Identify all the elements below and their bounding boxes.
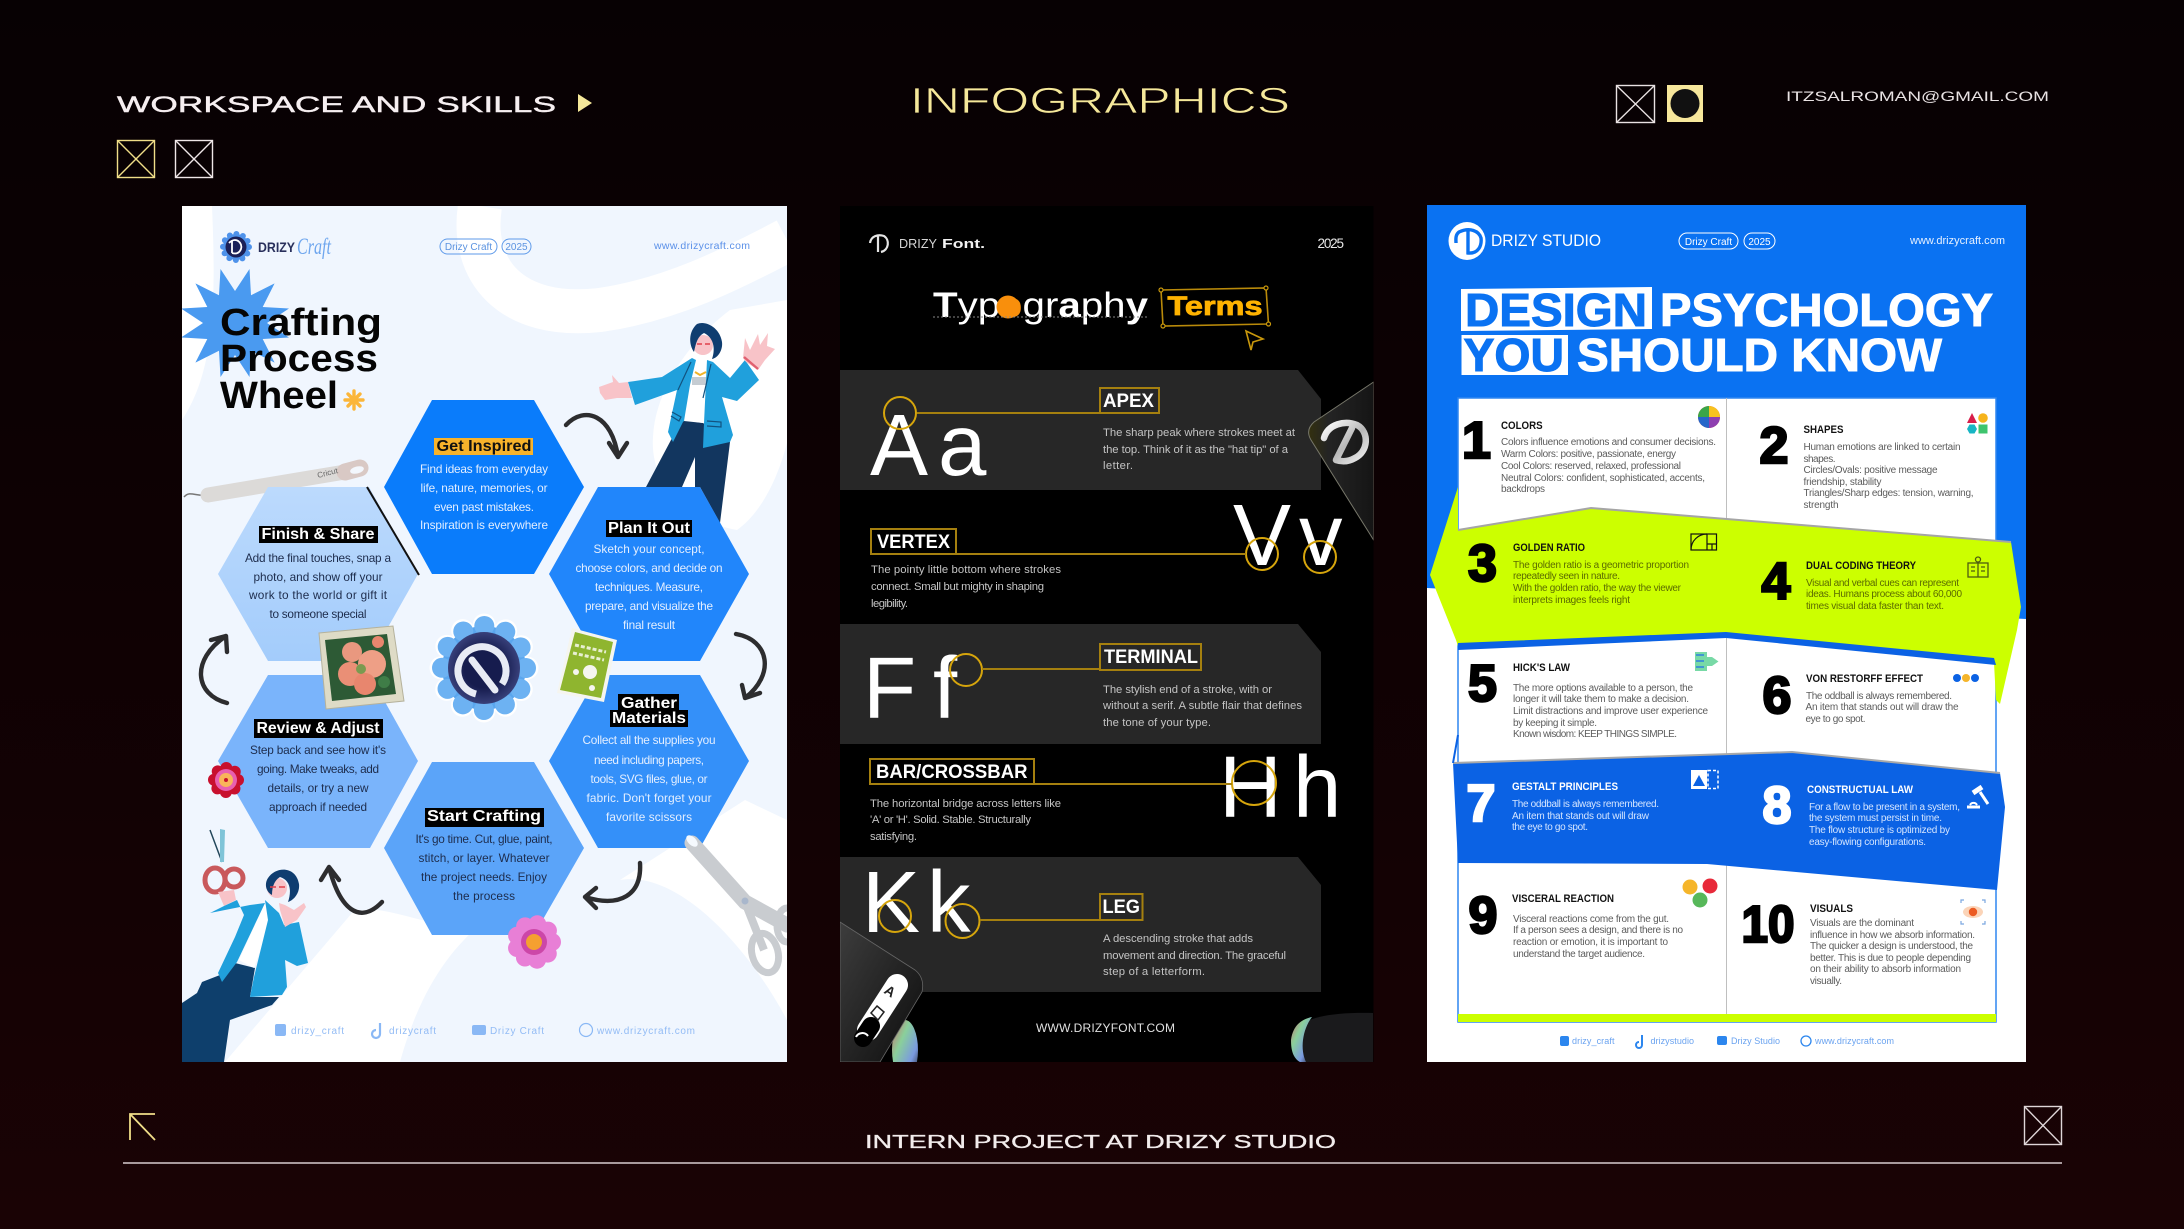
- hexagon: gather materials: Collect all the supplies you: [582, 733, 716, 747]
- icon: color wheel: [1698, 406, 1720, 428]
- term band: apex: The sharp peak where strokes meet at: [1103, 427, 1296, 439]
- term: bar crossbar: [869, 754, 1336, 842]
- illustration: scissors: [684, 833, 797, 976]
- heading: design psychology you should know: PSYCHOLOGY: [1660, 284, 1993, 336]
- item 9: visceral reaction: If a person sees a design, and there is no: [1513, 925, 1683, 936]
- hexagon: plan it out: techniques. Measure,: [595, 580, 703, 594]
- item 4: dual coding theory: Visual and verbal cues can represent: [1806, 578, 1959, 589]
- item 5: hick's law: Known wisdom: KEEP THINGS SIMPLE.: [1513, 729, 1677, 740]
- term: vertex: [870, 505, 1342, 610]
- term: bar crossbar: 'A' or 'H'. Solid. Stable. Structurally: [870, 814, 1031, 826]
- heading: crafting process wheel: Crafting: [220, 302, 382, 344]
- item 7: gestalt principles: the eye to go spot.: [1512, 822, 1588, 833]
- footer text: intern project: INTERN PROJECT AT DRIZY STUDIO: [865, 1132, 1336, 1152]
- term band: terminal: Ff: [863, 640, 958, 737]
- decorative glass tab with tool pill: [840, 922, 923, 1062]
- item 3: golden ratio: repeatedly seen in nature.: [1513, 571, 1620, 582]
- item 2: shapes: strength: [1804, 500, 1838, 511]
- hexagon: finish and share: work to the world or gift it: [248, 588, 388, 602]
- hexagon: get inspired: Get Inspired: [436, 438, 532, 455]
- panel: design psychology: [1427, 205, 2026, 1062]
- icon: blue star burst: [181, 269, 289, 377]
- item 5: hick's law: HICK'S LAW: [1513, 662, 1570, 674]
- term band: terminal: The stylish end of a stroke, with or: [1103, 684, 1272, 696]
- term band: leg: LEG: [1102, 897, 1140, 918]
- term: vertex: connect. Small but mighty in shaping: [871, 581, 1044, 593]
- item 5: hick's law: Limit distractions and improve user experience: [1513, 706, 1708, 717]
- item 2: shapes: [1760, 413, 1988, 511]
- logo: drizy font: [870, 235, 985, 252]
- social links row: drizystudio: [1650, 1036, 1694, 1046]
- logo: drizy craft: DRIZY: [258, 239, 296, 255]
- green band: [1430, 487, 2021, 704]
- item 10: visuals: The quicker a design is understood, the: [1810, 941, 1973, 952]
- item 9: visceral reaction: Visceral reactions come from the gut.: [1513, 914, 1669, 925]
- item 3: golden ratio: GOLDEN RATIO: [1513, 542, 1585, 554]
- item 1: colors: [1462, 406, 1720, 495]
- hexagon: gather materials: [549, 675, 749, 848]
- item 9: visceral reaction: VISCERAL REACTION: [1512, 893, 1614, 905]
- illustration: weeding tool: Cricut: [316, 466, 340, 480]
- icon: crossed box and filled circle box: [1616, 85, 1703, 122]
- hexagon: start crafting: stitch, or layer. Whatever: [418, 851, 550, 865]
- item 8: constructual law: For a flow to be present in a system,: [1809, 802, 1960, 813]
- hexagon: plan it out: choose colors, and decide on: [576, 561, 722, 575]
- header: workspace and skills: [117, 92, 592, 117]
- term: vertex: Vv: [1233, 487, 1343, 584]
- term band: leg: step of a letterform.: [1103, 966, 1205, 978]
- hexagon: plan it out: Sketch your concept,: [594, 542, 704, 556]
- item 10: visuals: 10: [1742, 896, 1794, 954]
- icon: three dots: [1953, 674, 1979, 682]
- item 6: von restorff effect: [1763, 667, 1979, 725]
- icon: gavel: [1967, 787, 1988, 807]
- hexagon: review and adjust: Step back and see how it's: [250, 743, 386, 757]
- hexagon: gather materials: need including papers,: [594, 753, 704, 767]
- website: www.drizycraft.com: [653, 240, 750, 252]
- heading: design psychology you should know: YOU: [1464, 329, 1564, 381]
- social links row: [275, 1023, 695, 1038]
- website footer: WWW.DRIZYFONT.COM: [1036, 1021, 1175, 1035]
- social links row: www.drizycraft.com: [1814, 1036, 1894, 1046]
- item 2: shapes: shapes.: [1804, 454, 1836, 465]
- logo: drizy studio: DRIZY STUDIO: [1491, 231, 1601, 250]
- logo: drizy font: DRIZY: [899, 236, 937, 251]
- item 3: golden ratio: With the golden ratio, the way the viewer: [1513, 583, 1682, 594]
- item 3: golden ratio: 3: [1468, 535, 1497, 593]
- term: bar crossbar: The horizontal bridge across letters like: [870, 798, 1061, 810]
- background swooshes: [182, 206, 787, 1062]
- term band: leg: [840, 854, 1321, 992]
- heading: design psychology you should know: SHOULD KNOW: [1577, 329, 1943, 381]
- year: 2025: [1318, 236, 1344, 251]
- item 10: visuals: on their ability to absorb information: [1810, 964, 1961, 975]
- pills: brand and year: [1679, 233, 1775, 249]
- social links row: drizy_craft: [1572, 1036, 1615, 1046]
- icon: crossed boxes left: [118, 140, 212, 178]
- pills: brand and year: Drizy Craft: [445, 242, 492, 253]
- hexagon: finish and share: to someone special: [270, 607, 366, 621]
- hexagon: review and adjust: [218, 675, 418, 848]
- term band: apex: letter.: [1103, 460, 1133, 472]
- item 5: hick's law: longer it will take them to make a decision.: [1513, 694, 1689, 705]
- hexagon: review and adjust: going. Make tweaks, add: [257, 762, 379, 776]
- icon: eye focus: [1961, 900, 1985, 924]
- hexagon: plan it out: Plan It Out: [608, 520, 691, 537]
- pills: brand and year: 2025: [1748, 237, 1771, 248]
- item 9: visceral reaction: reaction or emotion, it is important to: [1513, 937, 1668, 948]
- item 7: gestalt principles: An item that stands out will draw: [1512, 811, 1650, 822]
- term band: leg: A descending stroke that adds: [1103, 933, 1253, 945]
- term band: apex: the top. Think of it as the "hat tip" of a: [1103, 444, 1289, 456]
- hexagon: gather materials: Gather: [621, 695, 677, 712]
- hexagon: plan it out: final result: [623, 618, 676, 632]
- hexagon: start crafting: [384, 762, 584, 935]
- item 10: visuals: [1742, 896, 1985, 987]
- pills: brand and year: Drizy Craft: [1685, 237, 1732, 248]
- icon: emotion faces: [1682, 878, 1718, 908]
- title: infographics: INFOGRAPHICS: [910, 80, 1290, 121]
- item 2: shapes: friendship, stability: [1804, 477, 1882, 488]
- heading: design psychology you should know: DESIGN: [1465, 284, 1647, 336]
- social links row: www.drizycraft.com: [596, 1026, 695, 1037]
- item 8: constructual law: CONSTRUCTUAL LAW: [1807, 784, 1913, 796]
- term: bar crossbar: Hh: [1219, 739, 1341, 836]
- decorative iridescent shapes: [892, 1013, 1373, 1062]
- pills: brand and year: 2025: [505, 242, 528, 253]
- item 4: dual coding theory: ideas. Humans process about 60,000: [1806, 589, 1962, 600]
- hexagon: start crafting: Start Crafting: [427, 808, 541, 825]
- term: bar crossbar: satisfying.: [870, 831, 917, 843]
- icon: golden ratio: [1691, 534, 1716, 550]
- item 7: gestalt principles: [1467, 770, 1718, 833]
- item 6: von restorff effect: eye to go spot.: [1806, 714, 1866, 725]
- logo: drizy font: Font.: [942, 236, 985, 251]
- item 8: constructual law: [1763, 777, 1988, 848]
- decorative glass tab with D logo: [1309, 382, 1374, 540]
- heading: typography terms: Typography: [933, 286, 1149, 325]
- hexagon: start crafting: the process: [453, 889, 515, 903]
- logo: drizy craft: Craft: [297, 234, 331, 259]
- term band: apex: APEX: [1103, 391, 1154, 412]
- icon: corner arrow: [130, 1114, 155, 1140]
- item 4: dual coding theory: times visual data faster than text.: [1806, 601, 1944, 612]
- term band: terminal: TERMINAL: [1104, 647, 1198, 668]
- item 2: shapes: Human emotions are linked to certain: [1804, 442, 1960, 453]
- item 6: von restorff effect: An item that stands out will draw the: [1806, 702, 1959, 713]
- item 1: colors: Warm Colors: positive, passionate, energy: [1501, 449, 1676, 460]
- hexagon: review and adjust: Review & Adjust: [256, 720, 380, 737]
- item 3: golden ratio: [1468, 534, 1716, 606]
- icon: arrows converging: [1695, 652, 1718, 671]
- hexagon: finish and share: Add the final touches, snap a: [245, 551, 391, 565]
- illustration: weeding tool: [184, 465, 365, 497]
- heading: design psychology you should know: [1461, 284, 1993, 381]
- pills: brand and year: [440, 239, 531, 254]
- hexagon: gather materials: favorite scissors: [606, 810, 692, 824]
- item 2: shapes: 2: [1760, 417, 1788, 475]
- hexagon: get inspired: [384, 400, 584, 574]
- social links row: [1560, 1035, 1894, 1048]
- hexagon: plan it out: prepare, and visualize the: [585, 599, 713, 613]
- logo: drizy studio: [1448, 222, 1601, 260]
- item 5: hick's law: [1468, 652, 1718, 740]
- item 5: hick's law: 5: [1468, 655, 1497, 713]
- item 9: visceral reaction: [1469, 878, 1718, 960]
- hexagon: start crafting: the project needs. Enjoy: [421, 870, 547, 884]
- term: vertex: VERTEX: [877, 532, 950, 553]
- term band: terminal: [840, 624, 1321, 744]
- item 8: constructual law: the system must persist in time.: [1809, 813, 1942, 824]
- heading: crafting process wheel: Process: [220, 338, 378, 380]
- item 4: dual coding theory: 4: [1762, 553, 1791, 611]
- item 1: colors: Cool Colors: reserved, relaxed, professional: [1501, 461, 1681, 472]
- item 8: constructual law: easy-flowing configurations.: [1809, 837, 1926, 848]
- item 6: von restorff effect: 6: [1763, 667, 1791, 725]
- image: green paper card: [557, 628, 617, 702]
- social links row: Drizy Studio: [1731, 1036, 1780, 1046]
- hexagon: review and adjust: approach if needed: [269, 800, 367, 814]
- email: ITZSALROMAN@GMAIL.COM: [1786, 89, 2049, 104]
- item 3: golden ratio: interprets images feels right: [1513, 595, 1630, 606]
- item 1: colors: Neutral Colors: confident, sophisticated, accents,: [1501, 473, 1705, 484]
- white card grid: [1458, 398, 1996, 1022]
- term: vertex: legibility.: [871, 598, 908, 610]
- hexagon: start crafting: It's go time. Cut, glue, paint,: [416, 832, 552, 846]
- item 6: von restorff effect: VON RESTORFF EFFECT: [1806, 673, 1923, 685]
- heading: crafting process wheel: [220, 308, 380, 408]
- hexagon: get inspired: even past mistakes.: [434, 500, 534, 514]
- item 2: shapes: Triangles/Sharp edges: tension, warning,: [1804, 488, 1974, 499]
- decorative glass tab with tool pill: A: [881, 982, 899, 1001]
- item 7: gestalt principles: GESTALT PRINCIPLES: [1512, 781, 1618, 793]
- term band: terminal: the tone of your type.: [1103, 717, 1211, 729]
- header: workspace and skills: WORKSPACE AND SKILLS: [117, 92, 556, 117]
- logo: center badge: [441, 625, 527, 711]
- social links row: drizy_craft: [291, 1026, 344, 1037]
- blue band: [1453, 735, 2005, 890]
- item 1: colors: 1: [1462, 412, 1491, 470]
- item 7: gestalt principles: 7: [1467, 775, 1495, 833]
- item 10: visuals: Visuals are the dominant: [1810, 918, 1914, 929]
- illustration: woman in blue jacket: [599, 323, 775, 523]
- hexagon: finish and share: Finish & Share: [262, 526, 375, 543]
- hexagon: finish and share: [218, 487, 419, 661]
- icon: open book: [1968, 557, 1988, 577]
- item 9: visceral reaction: understand the target audience.: [1513, 949, 1645, 960]
- item 2: shapes: SHAPES: [1804, 424, 1844, 436]
- item 8: constructual law: 8: [1763, 777, 1791, 835]
- hexagon: gather materials: fabric. Don't forget your: [586, 791, 712, 805]
- image: framed flower artwork: [319, 626, 404, 709]
- item 9: visceral reaction: 9: [1469, 887, 1497, 945]
- icon: red flower: [214, 768, 238, 792]
- item 2: shapes: Circles/Ovals: positive message: [1804, 465, 1938, 476]
- term band: terminal: without a serif. A subtle flair that defines: [1102, 700, 1302, 712]
- term band: leg: movement and direction. The graceful: [1103, 950, 1286, 962]
- item 10: visuals: influence in how we absorb information.: [1810, 930, 1975, 941]
- term band: apex: Aa: [870, 397, 987, 494]
- social links row: drizycraft: [389, 1026, 436, 1037]
- item 6: von restorff effect: The oddball is always remembered.: [1806, 691, 1952, 702]
- heading: crafting process wheel: Wheel: [220, 375, 338, 417]
- heading: typography terms: [933, 286, 1270, 350]
- icon: crossed box bottom right: [2024, 1106, 2062, 1144]
- item 10: visuals: visually.: [1810, 976, 1842, 987]
- item 1: colors: COLORS: [1501, 420, 1543, 432]
- term: bar crossbar: BAR/CROSSBAR: [876, 762, 1028, 783]
- social links row: Drizy Craft: [490, 1026, 544, 1037]
- item 8: constructual law: The flow structure is optimized by: [1809, 825, 1950, 836]
- heading: typography terms: Terms: [1168, 291, 1262, 321]
- hexagon: get inspired: life, nature, memories, or: [420, 481, 548, 495]
- icon: gestalt image: [1691, 770, 1718, 789]
- item 1: colors: backdrops: [1501, 484, 1545, 495]
- item 10: visuals: better. This is due to people depending: [1810, 953, 1971, 964]
- item 4: dual coding theory: [1762, 553, 1988, 612]
- icon: shapes: [1967, 413, 1988, 434]
- item 5: hick's law: The more options available to a person, the: [1513, 683, 1693, 694]
- item 10: visuals: VISUALS: [1810, 903, 1853, 915]
- term band: apex: [840, 370, 1321, 494]
- hexagon: get inspired: Find ideas from everyday: [420, 462, 548, 476]
- hexagon: gather materials: Materials: [612, 710, 686, 727]
- hexagon: plan it out: [549, 487, 749, 661]
- term band: leg: Kk: [862, 854, 971, 951]
- item 4: dual coding theory: DUAL CODING THEORY: [1806, 560, 1916, 572]
- panel: typography terms: [840, 206, 1374, 1080]
- icon: pink flower: [516, 924, 552, 960]
- term: vertex: The pointy little bottom where strokes: [871, 564, 1061, 576]
- hexagon: finish and share: photo, and show off your: [254, 570, 383, 584]
- hexagon: gather materials: tools, SVG files, glue, or: [590, 772, 708, 786]
- hexagon: get inspired: Inspiration is everywhere: [420, 518, 548, 532]
- website: www.drizycraft.com: [1909, 235, 2005, 247]
- item 1: colors: Colors influence emotions and consumer decisions.: [1501, 437, 1716, 448]
- logo: drizy craft: [223, 234, 331, 260]
- item 7: gestalt principles: The oddball is always remembered.: [1512, 799, 1659, 810]
- panel: crafting process wheel: [181, 206, 797, 1062]
- arrows: clockwise process: [201, 415, 765, 913]
- icon: orange asterisk: [345, 391, 363, 409]
- item 3: golden ratio: The golden ratio is a geometric proportion: [1513, 560, 1689, 571]
- illustration: woman with scissors: [182, 829, 308, 1062]
- item 5: hick's law: by keeping it simple.: [1513, 718, 1597, 729]
- hexagon: review and adjust: details, or try a new: [268, 781, 369, 795]
